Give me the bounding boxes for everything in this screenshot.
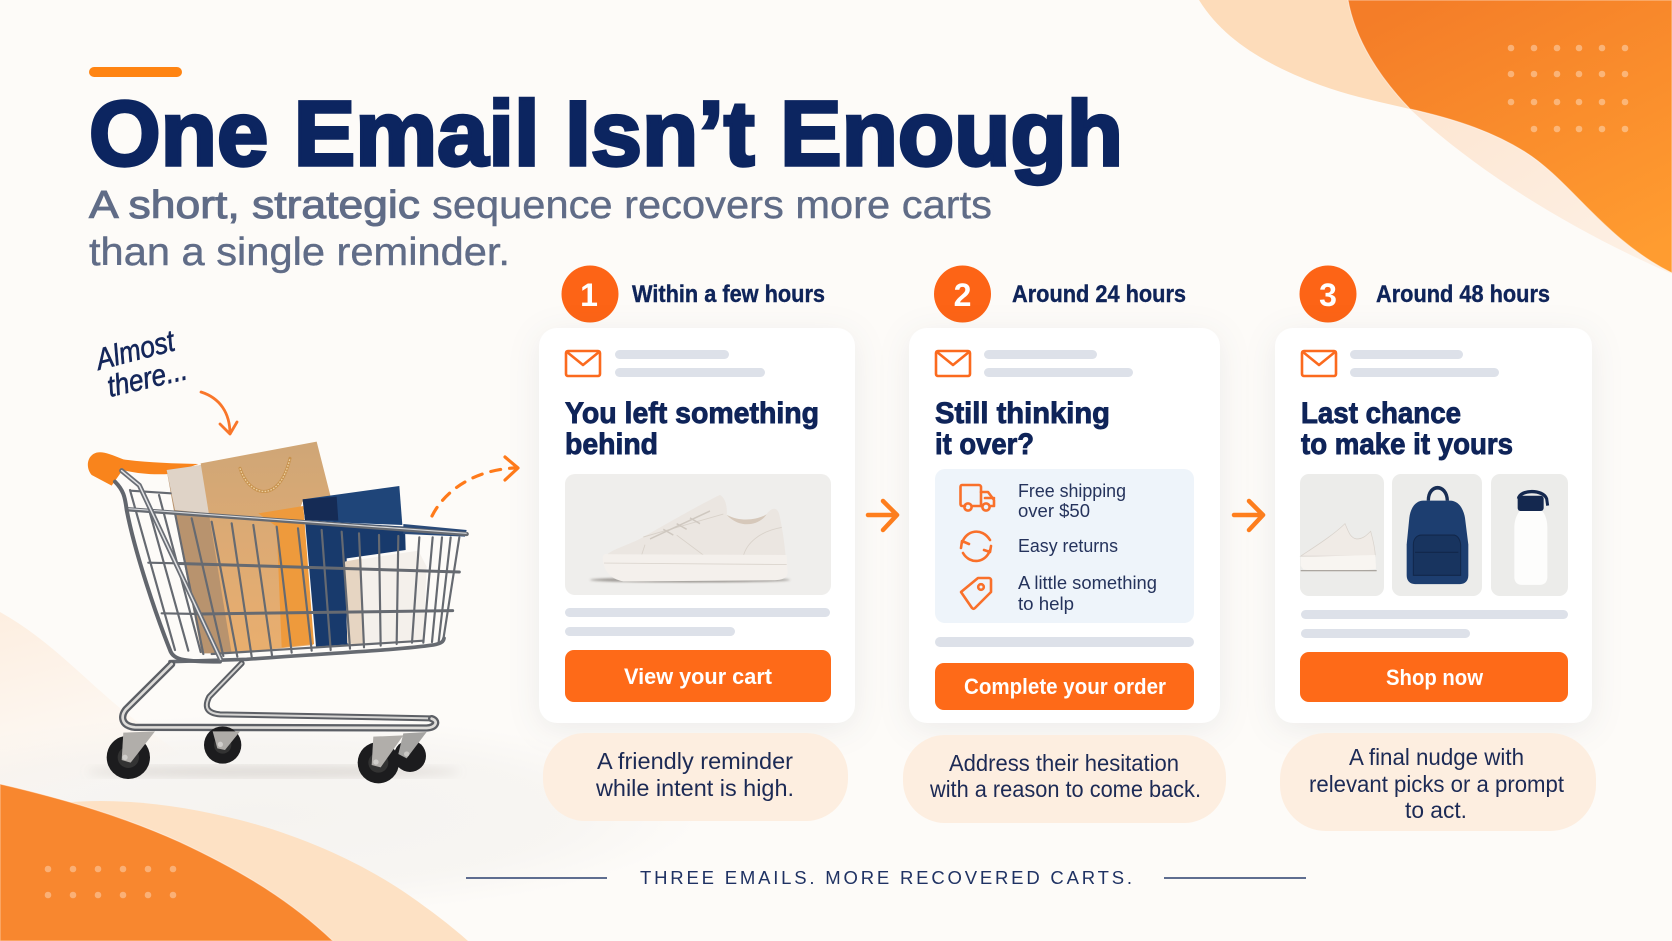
basket wires — [130, 490, 459, 662]
button: shop now: Shop now — [1386, 665, 1484, 690]
benefit: easy returns: Easy returns — [1018, 535, 1118, 556]
step 1 badge: 1 — [580, 277, 598, 313]
product image: white sneaker — [565, 474, 831, 595]
panel: email 3 card — [1275, 328, 1592, 723]
panel: email 2 card — [909, 328, 1220, 723]
beige box — [167, 465, 233, 653]
email 3 heading: to make it yours — [1301, 428, 1513, 461]
placeholder body lines — [565, 608, 830, 636]
placeholder body line — [935, 637, 1194, 647]
email 3 heading: Last chance — [1301, 397, 1461, 430]
caption: email 3: to act. — [1405, 797, 1467, 823]
caption: email 3: A final nudge with — [1349, 744, 1524, 770]
step 3 badge — [1300, 266, 1356, 322]
icon: price tag — [961, 578, 991, 609]
email 2 heading: Still thinking — [935, 397, 1110, 430]
placeholder header lines — [1350, 350, 1499, 377]
button: shop now — [1300, 652, 1568, 702]
placeholder header lines — [615, 350, 765, 377]
navy strip — [403, 524, 467, 537]
product tile: backpack — [1392, 474, 1482, 596]
email 3 heading — [1301, 397, 1513, 461]
benefit: free shipping: Free shipping — [1018, 480, 1126, 501]
dot grid: bottom left — [45, 866, 176, 898]
decorative shape: top right peach wave — [1199, 0, 1420, 109]
panel: email 1 card — [539, 328, 855, 723]
step 1 badge — [562, 266, 618, 322]
email 2 heading — [935, 397, 1110, 461]
step 2 badge: 2 — [954, 277, 971, 313]
step 3 badge: 3 — [1319, 277, 1337, 313]
caption: email 3: relevant picks or a prompt — [1309, 771, 1565, 797]
decorative shape: top right orange blob — [1348, 0, 1672, 273]
email 2 heading: it over? — [935, 428, 1034, 461]
left frame — [115, 471, 221, 662]
caption: email 2 — [903, 735, 1226, 823]
email 1 heading: behind — [565, 428, 658, 461]
button: view your cart: View your cart — [624, 664, 773, 689]
caption: email 2: Address their hesitation — [949, 750, 1179, 776]
decorative shape: floor tone — [0, 715, 700, 915]
benefit: a little something: A little something — [1018, 572, 1157, 593]
subtitle: sequence recovers more carts — [432, 184, 992, 227]
handwritten note: Almost there — [91, 324, 190, 404]
icon: truck — [960, 485, 994, 511]
caption: email 2: with a reason to come back. — [929, 776, 1201, 802]
benefit: free shipping: over $50 — [1018, 500, 1090, 521]
benefit: a little something: to help — [1018, 593, 1074, 614]
subtitle — [89, 184, 992, 274]
caption: email 1: A friendly reminder — [597, 748, 793, 774]
caption: email 3 — [1280, 733, 1596, 831]
handwritten note: Almost there: there... — [104, 353, 190, 404]
benefits panel — [935, 469, 1194, 623]
dot grid: top right — [1508, 45, 1628, 132]
step 3 timing label: Around 48 hours — [1376, 281, 1550, 308]
step 1 timing label: Within a few hours — [632, 281, 825, 308]
handwritten note: Almost there: Almost — [91, 324, 180, 377]
benefit: free shipping — [1018, 480, 1126, 521]
icon: envelope — [1302, 351, 1336, 376]
decorative shape: bottom left orange blob — [0, 784, 333, 941]
title: One Email Isn’t Enough — [89, 83, 1123, 185]
navy box — [305, 520, 406, 647]
step 2 badge — [934, 266, 991, 322]
step 2 timing label: Around 24 hours — [1012, 281, 1186, 308]
product tile: bottle — [1491, 474, 1568, 596]
top rim — [128, 509, 467, 534]
orange box — [258, 506, 314, 647]
benefit: a little something — [1018, 572, 1157, 614]
kraft shopping bag — [201, 442, 331, 653]
footer tagline: THREE EMAILS. MORE RECOVERED CARTS. — [640, 867, 1132, 888]
caption: email 1: while intent is high. — [595, 775, 794, 801]
email 1 heading: You left something — [565, 397, 819, 430]
arrow: step 1 to step 2 — [868, 501, 897, 530]
placeholder header lines — [984, 350, 1133, 377]
arrow: step 2 to step 3 — [1234, 501, 1263, 530]
placeholder body lines — [1301, 610, 1568, 638]
orange handle — [88, 452, 198, 486]
icon: envelope — [936, 351, 970, 376]
button: complete your order: Complete your order — [964, 674, 1166, 699]
decorative shape: left pale wave — [0, 612, 230, 790]
bag rope handle — [240, 458, 290, 491]
wheels — [107, 726, 427, 783]
white box — [345, 551, 427, 645]
icon: envelope — [566, 351, 600, 376]
accent bar above title — [89, 67, 182, 77]
button: view your cart — [565, 650, 831, 702]
caption: email 1 — [543, 733, 848, 821]
chassis — [123, 663, 436, 728]
cart floor shadow — [87, 766, 460, 778]
button: complete your order — [935, 663, 1194, 710]
decorative shape: bottom left peach wave — [60, 801, 468, 941]
subtitle: than a single reminder. — [89, 231, 510, 274]
arrow: dashed cart to emails — [432, 457, 518, 516]
decorative shape: top right pale wave — [1410, 109, 1672, 274]
arrow: note to cart — [201, 392, 237, 434]
icon: returns — [961, 532, 991, 561]
illustration: shopping cart — [87, 442, 467, 783]
subtitle: A short, strategic — [89, 184, 420, 227]
email 1 heading — [565, 397, 819, 461]
product tile: sneaker — [1300, 474, 1384, 596]
